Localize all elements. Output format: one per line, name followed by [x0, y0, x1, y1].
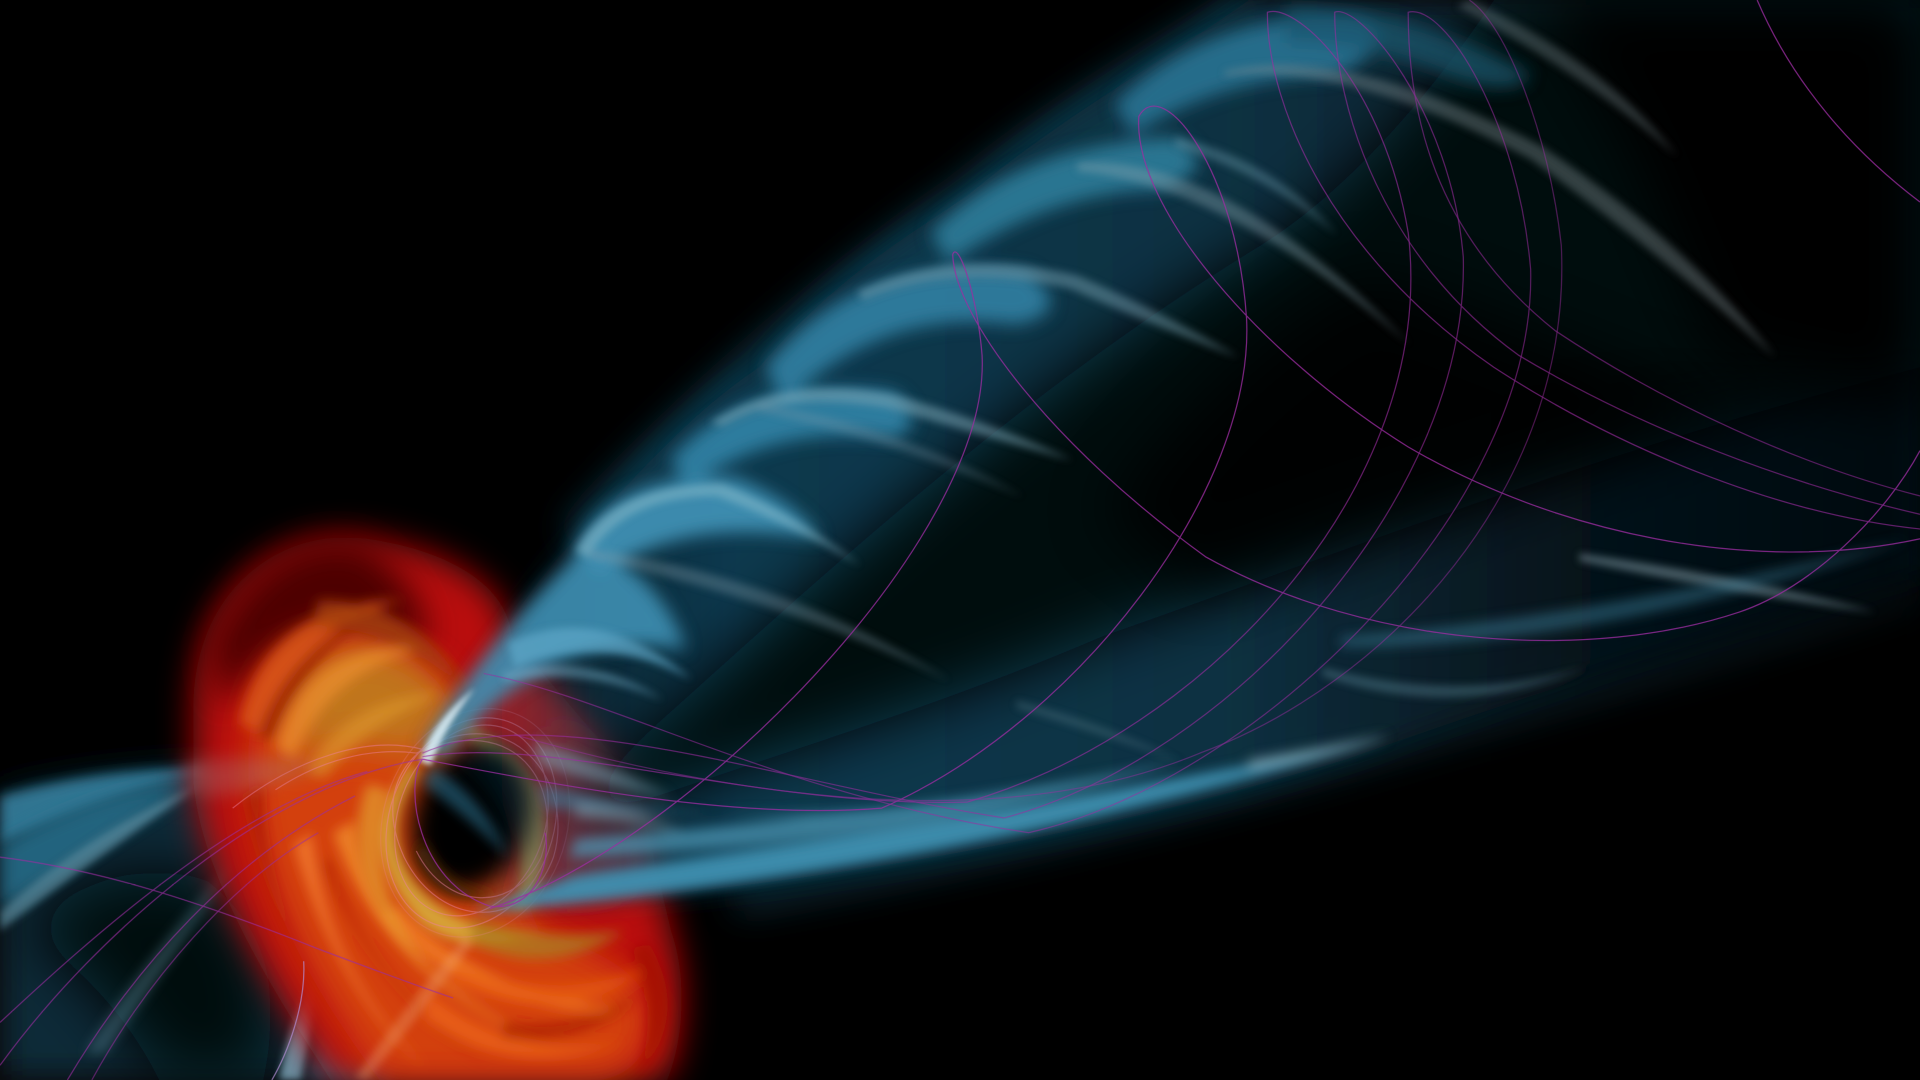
- jet: streaks inside hole: [422, 765, 508, 857]
- black hole shadow: [390, 727, 553, 909]
- jet: upper edge scallops: [422, 6, 1531, 759]
- jet: soft outer haze: [576, 5, 1249, 539]
- disk: orange body: [248, 632, 651, 1080]
- main jet cone: [420, 0, 1920, 912]
- disk: far-side red behind jet: [551, 722, 638, 898]
- disk: dark top-left lobe: [208, 541, 426, 710]
- jet: cone body: [422, 0, 1920, 912]
- jet: right end fade: [1224, 367, 1920, 857]
- disk: swirling streaks: [239, 600, 668, 1078]
- disk: outer red: [193, 537, 682, 1080]
- accretion disk: [184, 537, 682, 1080]
- jet: lower bright band: [471, 539, 1910, 912]
- disk: yellow inner ring: [357, 722, 624, 967]
- jet: dark interior: [576, 0, 1920, 820]
- disk: pink rim lines: [233, 684, 598, 962]
- disk: golden upper body: [288, 647, 459, 765]
- lower-left jet: [0, 765, 416, 1080]
- disk: pale diagonal streak: [355, 937, 471, 1080]
- disk: pale band crossing left: [184, 758, 324, 796]
- jet: pale streaks: [502, 0, 1876, 762]
- jet: base highlight: [420, 688, 475, 765]
- jet: top-right fade: [1543, 0, 1920, 404]
